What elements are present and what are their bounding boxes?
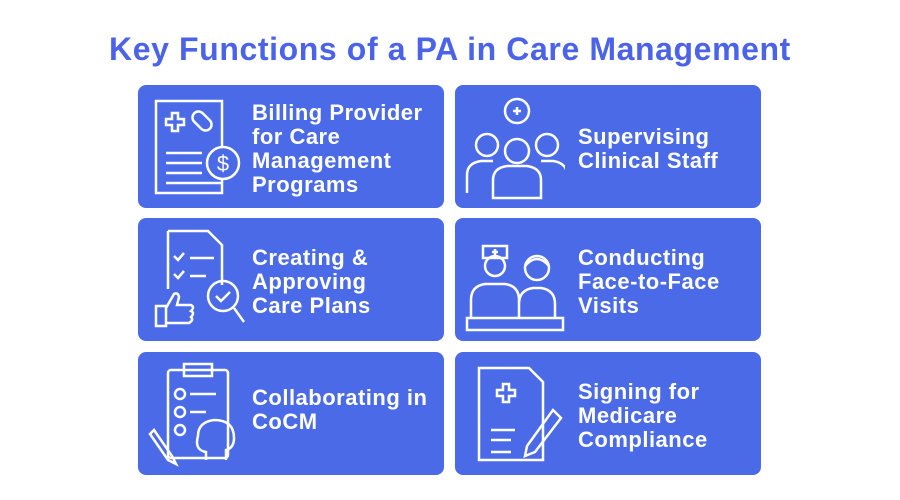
panel: collaborating [138,352,444,475]
text: Billing Provider [252,100,423,125]
icon: checklist with magnifier [154,230,245,328]
text: Care Plans [252,293,371,318]
text [578,124,718,173]
text: Collaborating in [252,385,427,410]
text [578,245,720,318]
icon: doctor and patient [466,244,564,332]
text: Conducting [578,245,705,270]
icon: clipboard with brain [148,362,236,467]
text: Visits [578,293,639,318]
icon: bill with dollar: $ [217,151,229,176]
title: Key Functions of a PA in Care Management [109,31,791,67]
panel: medicare compliance [455,352,761,475]
text: for Care [252,124,340,149]
icon: bill with dollar [154,100,240,194]
icon: signed document [478,366,563,462]
panel: supervising staff [455,85,761,208]
text [252,385,427,434]
text: Creating & [252,245,368,270]
text: Clinical Staff [578,148,718,173]
text: Compliance [578,427,708,452]
text: Medicare [578,403,677,428]
text [252,245,371,318]
panel: face-to-face [455,218,761,341]
text: Management [252,148,391,173]
text: Supervising [578,124,709,149]
icon: clinical team [466,98,565,200]
text [252,100,423,197]
panel: care plans [138,218,444,341]
text: Programs [252,172,359,197]
panel: billing provider [138,85,444,208]
text: Face-to-Face [578,269,720,294]
text: CoCM [252,409,318,434]
text: Approving [252,269,366,294]
text [578,379,708,452]
text: Signing for [578,379,700,404]
